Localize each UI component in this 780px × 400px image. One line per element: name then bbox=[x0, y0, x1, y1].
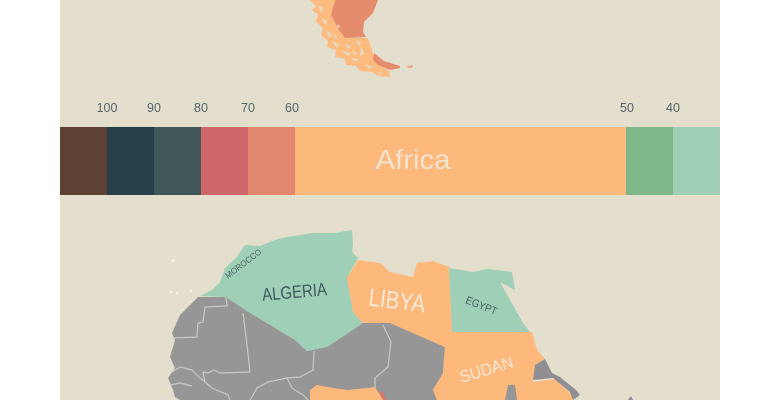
scale labels: 90 bbox=[147, 101, 161, 115]
region: South Sudan gap bbox=[505, 385, 517, 400]
scale labels: 80 bbox=[194, 101, 208, 115]
map: northern Africa bbox=[168, 230, 633, 400]
scale labels: 40 bbox=[666, 101, 680, 115]
region: grey countries bbox=[168, 297, 445, 400]
region: Chile and southern Argentina bbox=[310, 0, 390, 77]
bar heading: Africa: Africa bbox=[376, 144, 451, 175]
scale labels: 60 bbox=[285, 101, 299, 115]
colour scale bar bbox=[60, 127, 720, 195]
region: Tierra del Fuego bbox=[373, 53, 400, 70]
region: Argentina bbox=[331, 0, 378, 38]
scale labels: 70 bbox=[241, 101, 255, 115]
region: Eritrea coast bbox=[533, 359, 580, 400]
Canary Islands bbox=[170, 259, 192, 294]
scale labels: 50 bbox=[620, 101, 634, 115]
label: Morocco: MOROCCO bbox=[223, 246, 264, 281]
region: Cameroon sliver bbox=[379, 390, 386, 400]
label: Libya: LIBYA bbox=[367, 284, 427, 318]
fjord gaps bbox=[318, 5, 382, 75]
label: Egypt: EGYPT bbox=[464, 294, 499, 318]
label: Sudan: SUDAN bbox=[457, 353, 515, 387]
region: Horn speck bbox=[628, 396, 633, 400]
region: Nigeria bbox=[310, 385, 383, 400]
island specks bbox=[407, 65, 413, 68]
scale labels: 100 bbox=[97, 101, 117, 115]
region: Algeria bbox=[200, 230, 363, 351]
country borders bbox=[170, 297, 391, 400]
region: Libya bbox=[347, 260, 452, 347]
map: southern tip of South America bbox=[310, 0, 413, 77]
region: Sudan bbox=[433, 332, 573, 400]
label: Algeria: ALGERIA bbox=[261, 279, 328, 305]
region: Egypt bbox=[449, 268, 530, 332]
scale labels bbox=[97, 101, 680, 115]
